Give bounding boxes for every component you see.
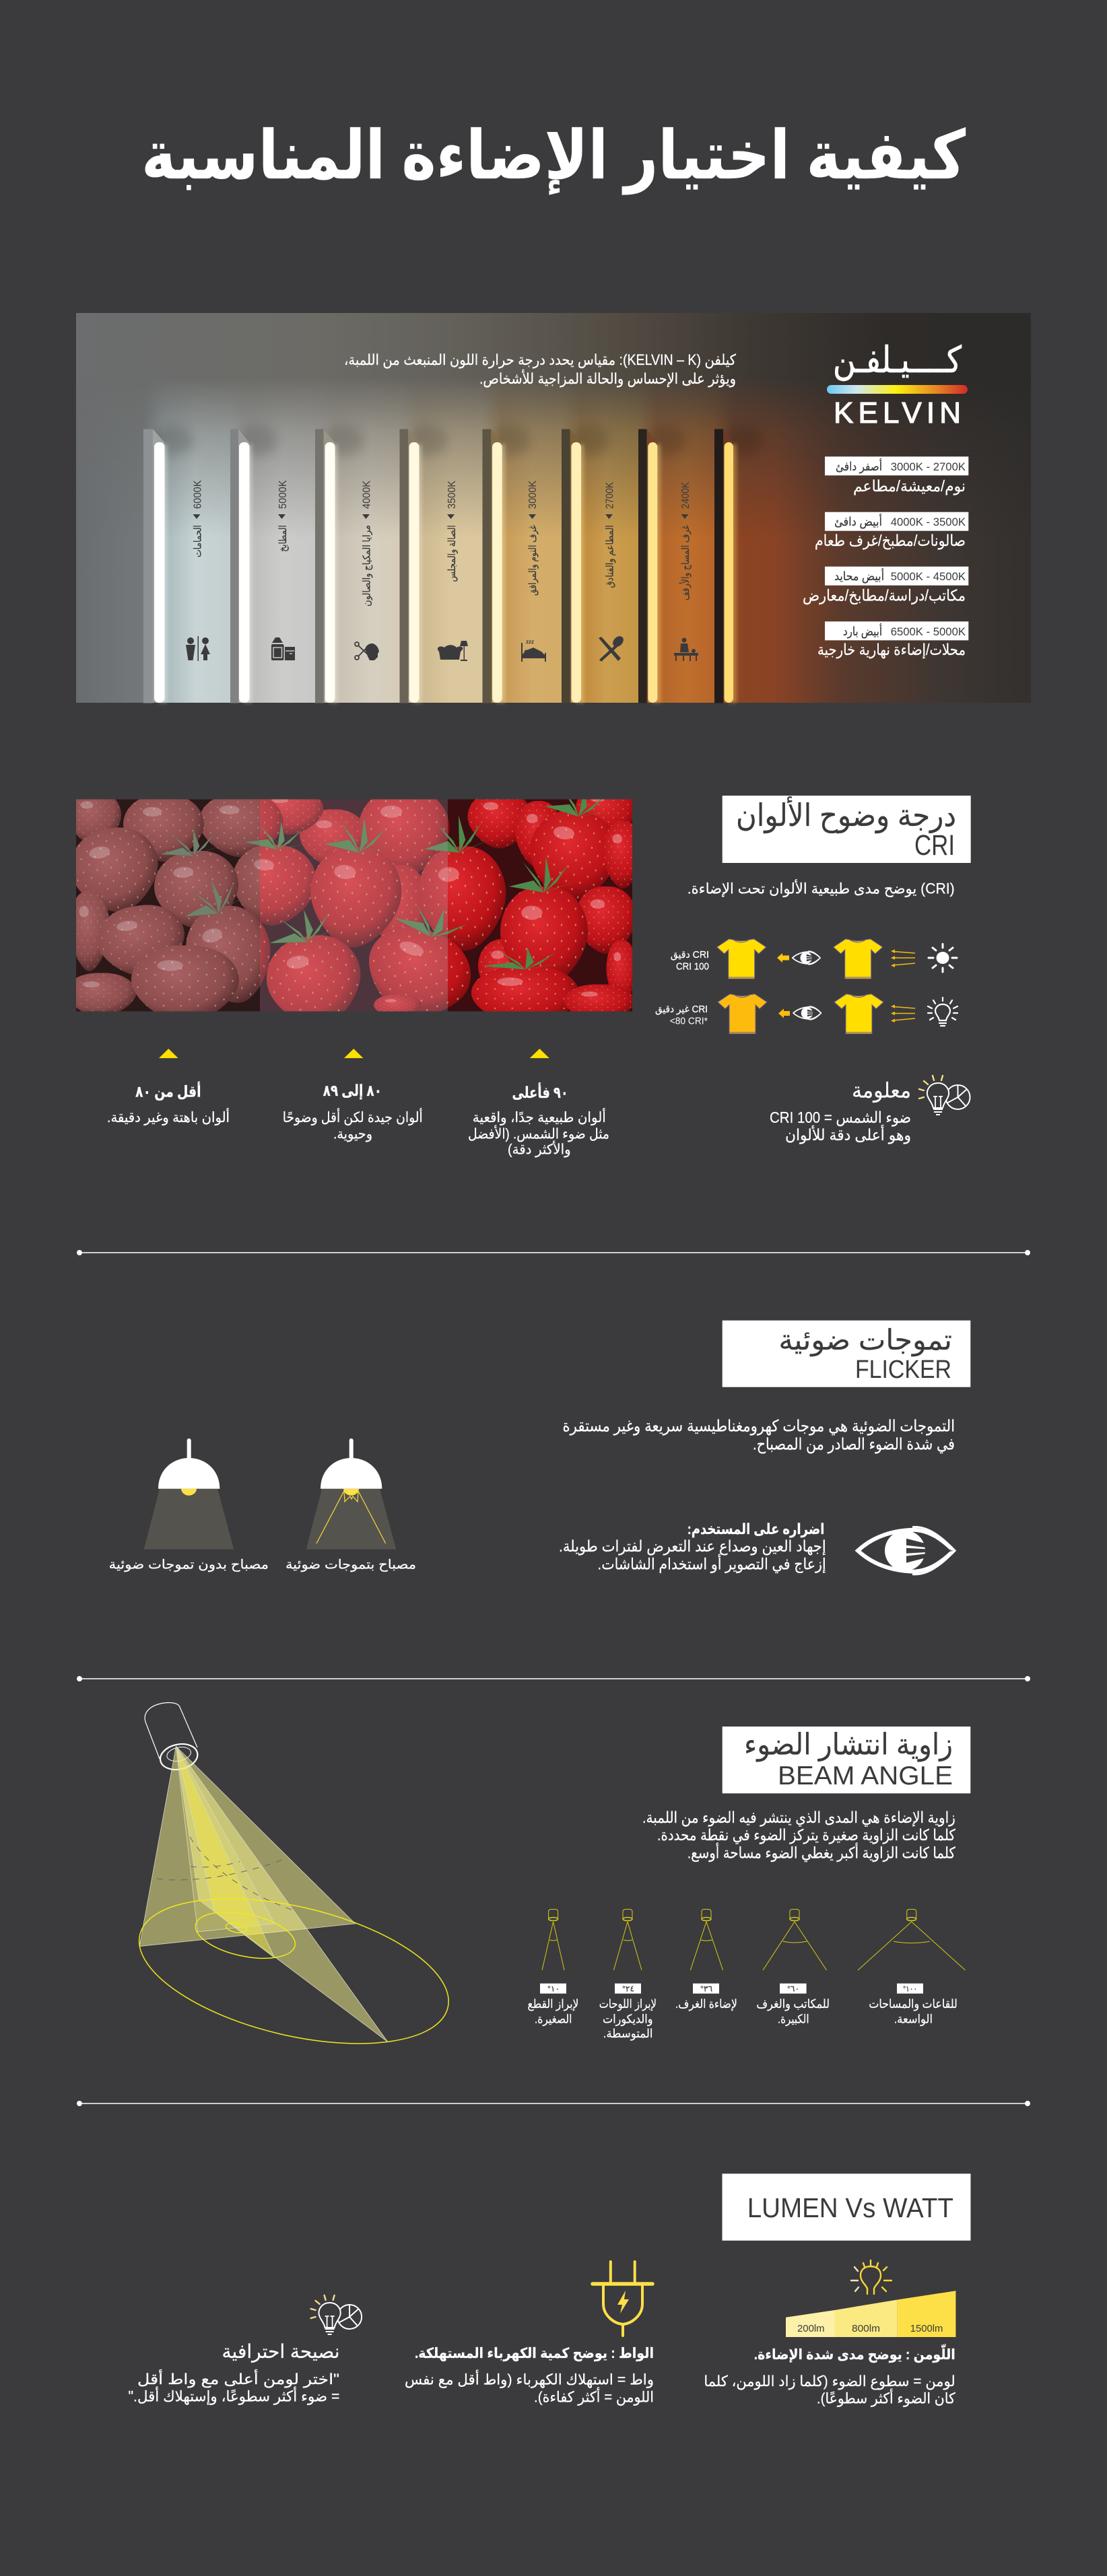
beam type: 10 degrees bbox=[528, 1909, 578, 2027]
icon: scissors and head bbox=[355, 642, 379, 660]
beam type: 36 degrees: لإضاءة الغرف. bbox=[675, 1997, 737, 2011]
kelvin range 2700-3000 bbox=[825, 456, 968, 495]
icon: eye bbox=[793, 951, 820, 965]
dashed angle arcs bbox=[157, 1837, 292, 1910]
kelvin range 2700-3000: أصفر دافئ bbox=[836, 458, 882, 474]
beam description: زاوية الإضاءة هي المدى الذي ينتشر فيه الضوء من اللمبة. bbox=[642, 1809, 955, 1827]
light rays bbox=[891, 1004, 915, 1022]
heading: lumen vs watt bbox=[722, 2173, 971, 2241]
light planes bbox=[139, 1746, 388, 2042]
watt text: الواط : يوضح كمية الكهرباء المستهلكة. bbox=[415, 2346, 654, 2361]
beam description: كلما كانت الزاوية صغيرة يتركز الضوء في نقطة محددة. bbox=[657, 1826, 955, 1844]
lumen text bbox=[704, 2343, 955, 2407]
pro tip panel bbox=[128, 2295, 362, 2406]
heading: flicker bbox=[723, 1321, 970, 1387]
icon: sofa and lamp bbox=[438, 641, 468, 661]
fixtures: light strips bbox=[143, 429, 737, 703]
kelvin range 4500-5000: مكاتب/دراسة/مطابخ/معارض bbox=[803, 587, 966, 605]
beam description: كلما كانت الزاوية أكبر يغطي الضوء مساحة أوسع. bbox=[687, 1843, 955, 1863]
CRI column: 80 to 89: ٨٠ إلى ٨٩ bbox=[323, 1082, 382, 1100]
panel: kelvin bbox=[76, 313, 1031, 703]
tip text bbox=[128, 2341, 339, 2406]
fixture label 4000K: 4000K bbox=[361, 481, 373, 509]
beam type: 60 degrees: الكبيرة. bbox=[778, 2013, 809, 2027]
illustration: spotlight beam bbox=[125, 1702, 463, 2070]
light rays bbox=[891, 949, 915, 967]
CRI column: below 80: أقل من ٨٠ bbox=[135, 1081, 201, 1101]
beam type: 24 degrees: لإبراز اللوحات bbox=[599, 1997, 657, 2011]
kelvin description bbox=[344, 351, 736, 388]
watt text: واط = استهلاك الكهرباء (واط أقل مع نفس bbox=[405, 2370, 654, 2389]
fixture label 5000K bbox=[277, 480, 289, 552]
beam type: 60 degrees bbox=[756, 1909, 830, 2027]
icon: eye bbox=[793, 1006, 821, 1020]
kelvin range 2700-3000: 3000K - 2700K bbox=[891, 460, 966, 473]
flicker description: في شدة الضوء الصادر من المصباح. bbox=[753, 1435, 955, 1453]
fixture label 3000K: 3000K bbox=[527, 481, 539, 509]
beam type: 24 degrees: ٢٤° bbox=[622, 1984, 634, 1994]
kelvin range 3500-4000 bbox=[815, 512, 968, 550]
flicker harms: إجهاد العين وصداع عند التعرض لفترات طويلة. bbox=[559, 1537, 826, 1556]
shirt: true colour bbox=[834, 994, 883, 1034]
shirt: seen colour bbox=[718, 994, 767, 1034]
watt text bbox=[405, 2346, 654, 2405]
beam type: 24 degrees: والديكورات bbox=[603, 2013, 653, 2027]
kelvin range 5000-6500: أبيض بارد bbox=[843, 623, 882, 639]
info heading: معلومة bbox=[852, 1079, 911, 1103]
lumen panel bbox=[704, 2260, 955, 2407]
label: inaccurate bbox=[655, 1004, 708, 1027]
kelvin range 3500-4000: أبيض دافئ bbox=[834, 514, 882, 529]
info text: ضوء الشمس = CRI 100 bbox=[770, 1109, 911, 1127]
fixture label 5000K: 5000K bbox=[277, 480, 289, 509]
lamp without flicker bbox=[109, 1438, 269, 1572]
fixture label 3500K bbox=[446, 481, 458, 582]
kelvin range 3500-4000: صالونات/مطبخ/غرف طعام bbox=[815, 532, 966, 550]
beam type: 100 degrees: للقاعات والمساحات bbox=[869, 1997, 958, 2011]
fixture label 2700K bbox=[605, 482, 615, 588]
heading: flicker: FLICKER bbox=[855, 1356, 951, 1384]
label: inaccurate: CRI غير دقيق bbox=[655, 1004, 708, 1015]
fixture label 2400K bbox=[679, 482, 692, 600]
info text bbox=[770, 1109, 911, 1144]
label: accurate bbox=[671, 949, 709, 972]
beam type: 36 degrees bbox=[675, 1909, 737, 2011]
beam type: 60 degrees: ٦٠° bbox=[787, 1984, 799, 1994]
fixture label 6000K bbox=[193, 480, 203, 557]
label: inaccurate: <80 CRI* bbox=[670, 1016, 708, 1027]
icon: light bulb bbox=[928, 998, 958, 1026]
info: sunlight CRI bbox=[770, 1076, 970, 1144]
kelvin logo: KELVIN bbox=[834, 396, 961, 429]
kelvin range 2700-3000: نوم/معيشة/مطاعم bbox=[853, 477, 966, 495]
kelvin range 4500-5000 bbox=[803, 567, 968, 605]
kelvin logo bbox=[827, 340, 968, 429]
fixture label 5000K: المطابخ bbox=[277, 525, 289, 552]
kelvin range 4500-5000: 5000K - 4500K bbox=[891, 570, 966, 583]
CRI column: below 80: ألوان باهتة وغير دقيقة. bbox=[107, 1108, 230, 1125]
beam type: 100 degrees: الواسعة. bbox=[894, 2013, 933, 2027]
label: accurate: CRI دقيق bbox=[671, 949, 709, 961]
fixture label 6000K: 6000K bbox=[193, 480, 203, 509]
flicker harms: اضراره على المستخدم: bbox=[687, 1521, 824, 1538]
CRI column: 90 and above: مثل ضوء الشمس. (الأفضل bbox=[468, 1125, 609, 1142]
lumen scale ramp: 200lm bbox=[797, 2323, 825, 2334]
icon: bulb and pie bbox=[311, 2295, 362, 2334]
CRI column: 90 and above: والأكثر دقة) bbox=[508, 1141, 571, 1158]
beam type: 10 degrees: لإبراز القطع bbox=[528, 1997, 578, 2011]
shirt: seen colour bbox=[717, 939, 766, 979]
fixture label 3500K: 3500K bbox=[446, 481, 458, 509]
kelvin range 5000-6500 bbox=[817, 621, 968, 659]
beam type: 24 degrees bbox=[599, 1909, 657, 2041]
tip text: نصيحة احترافية bbox=[222, 2341, 339, 2363]
beam type: 10 degrees: ١٠° bbox=[547, 1984, 560, 1994]
CRI column: 90 and above: ألوان طبيعية جدًا، واقعية bbox=[473, 1108, 606, 1125]
lumen scale ramp: 800lm bbox=[852, 2323, 880, 2334]
fixture label 2700K: 2700K bbox=[605, 482, 615, 509]
diagram: CRI accurate row bbox=[671, 939, 957, 979]
kelvin range 3500-4000: 4000K - 3500K bbox=[891, 516, 966, 528]
lumen text: لومن = سطوع الضوء (كلما زاد اللومن، كلما bbox=[704, 2373, 955, 2390]
heading: beam angle: زاوية انتشار الضوء bbox=[744, 1729, 953, 1762]
fixture label 6000K: الحمامات bbox=[193, 525, 203, 557]
flicker harms: إزعاج في التصوير أو استخدام الشاشات. bbox=[598, 1554, 826, 1574]
lumen scale ramp: 1500lm bbox=[910, 2323, 943, 2334]
title: كيفية اختيار الإضاءة المناسبة bbox=[141, 118, 966, 195]
label: accurate: 100 CRI bbox=[676, 961, 709, 972]
lamp with flicker: مصباح بتموجات ضوئية bbox=[286, 1558, 416, 1572]
arrow bbox=[777, 953, 789, 963]
fixture label 2700K: المطاعم والفنادق bbox=[605, 525, 615, 588]
spotlight housing bbox=[145, 1702, 200, 1773]
kelvin range 5000-6500: 6500K - 5000K bbox=[891, 625, 966, 638]
icon: kitchen bbox=[271, 637, 295, 660]
heading: flicker: تموجات ضوئية bbox=[778, 1324, 952, 1356]
CRI column: 90 and above: ٩٠ فأعلى bbox=[512, 1082, 568, 1101]
icon: fork and spoon bbox=[599, 634, 626, 662]
icon: bed bbox=[521, 639, 546, 662]
CRI column: 80 to 89 bbox=[283, 1049, 423, 1142]
fixture label 2400K: 2400K bbox=[680, 482, 692, 509]
fixture label 4000K: مرايا المكياج والصالون bbox=[361, 525, 373, 606]
beam type: 10 degrees: الصغيرة. bbox=[535, 2013, 572, 2027]
heading: CRI: درجة وضوح الألوان bbox=[736, 796, 956, 834]
kelvin description: كيلفن (KELVIN – K): مقياس يحدد درجة حرارة اللون المنبعث من اللمبة، bbox=[344, 351, 736, 369]
heading: lumen vs watt: LUMEN Vs WATT bbox=[747, 2192, 953, 2223]
icon: bulb and pie bbox=[919, 1076, 970, 1115]
lamp without flicker: مصباح بدون تموجات ضوئية bbox=[109, 1558, 269, 1572]
CRI description: (CRI) يوضح مدى طبيعية الألوان تحت الإضاءة. bbox=[687, 880, 955, 897]
flicker description: التموجات الضوئية هي موجات كهرومغناطيسية سريعة وغير مستقرة bbox=[563, 1418, 955, 1436]
watt text: اللومن = أكثر كفاءة). bbox=[534, 2387, 654, 2405]
fixture label 3000K: غرف النوم والمرافق bbox=[527, 525, 539, 596]
CRI column: 90 and above bbox=[468, 1049, 609, 1158]
icon: large eye bbox=[858, 1527, 953, 1574]
beam outlines bbox=[125, 1872, 463, 2070]
icon: yellow bulb bbox=[851, 2260, 892, 2294]
diagram: CRI inaccurate row bbox=[655, 994, 958, 1034]
kelvin range 4500-5000: أبيض محايد bbox=[834, 568, 884, 584]
CRI column: 80 to 89: وحيوية. bbox=[333, 1127, 372, 1142]
CRI column: below 80 bbox=[107, 1049, 230, 1125]
icon: restroom bbox=[186, 636, 210, 661]
kelvin range 5000-6500: محلات/إضاءة نهارية خارجية bbox=[817, 641, 966, 659]
lumen scale ramp bbox=[786, 2291, 955, 2337]
icon: massage table bbox=[674, 638, 698, 661]
beam type: 24 degrees: المتوسطة. bbox=[603, 2027, 653, 2041]
fixture label 2400K: غرف المساج والأرفف bbox=[679, 525, 692, 600]
flicker harms bbox=[559, 1521, 826, 1574]
beam type: 60 degrees: للمكاتب والغرف bbox=[756, 1997, 830, 2011]
fixture label 3500K: الصالة والمجلس bbox=[446, 525, 458, 582]
strawberries comparison image bbox=[76, 800, 632, 1011]
tip text: = ضوء أكثر سطوعًا، وإستهلاك أقل." bbox=[128, 2387, 339, 2406]
lumen text: كان الضوء أكثر سطوعًا). bbox=[817, 2389, 955, 2407]
kelvin description: ويؤثر على الإحساس والحالة المزاجية للأشخاص. bbox=[479, 370, 736, 388]
lamp with flicker bbox=[286, 1438, 416, 1572]
CRI column: 80 to 89: ألوان جيدة لكن أقل وضوحًا bbox=[283, 1108, 423, 1125]
arrow bbox=[778, 1008, 790, 1018]
beam description bbox=[642, 1809, 955, 1863]
heading: CRI bbox=[723, 796, 971, 863]
beam type: 36 degrees: ٣٦° bbox=[700, 1984, 712, 1994]
tip text: "اختر لومن أعلى مع واط أقل bbox=[137, 2369, 339, 2388]
info text: وهو أعلى دقة للألوان bbox=[785, 1125, 911, 1144]
lumen text: اللّومن : يوضح مدى شدة الإضاءة. bbox=[754, 2343, 955, 2363]
watt panel bbox=[405, 2262, 654, 2405]
heading: beam angle bbox=[723, 1727, 970, 1793]
flicker description bbox=[563, 1418, 955, 1453]
beam type: 100 degrees: ١٠٠° bbox=[903, 1984, 917, 1994]
beam type: 100 degrees bbox=[858, 1909, 966, 2027]
shirt: true colour bbox=[834, 939, 883, 979]
heading: CRI: CRI bbox=[914, 829, 955, 862]
icon: sun bbox=[929, 944, 957, 972]
icon: bed: zzz bbox=[526, 639, 534, 645]
kelvin logo: كــــيـلفـن bbox=[833, 340, 962, 381]
icon: plug bbox=[593, 2262, 652, 2336]
heading: beam angle: BEAM ANGLE bbox=[778, 1762, 953, 1790]
